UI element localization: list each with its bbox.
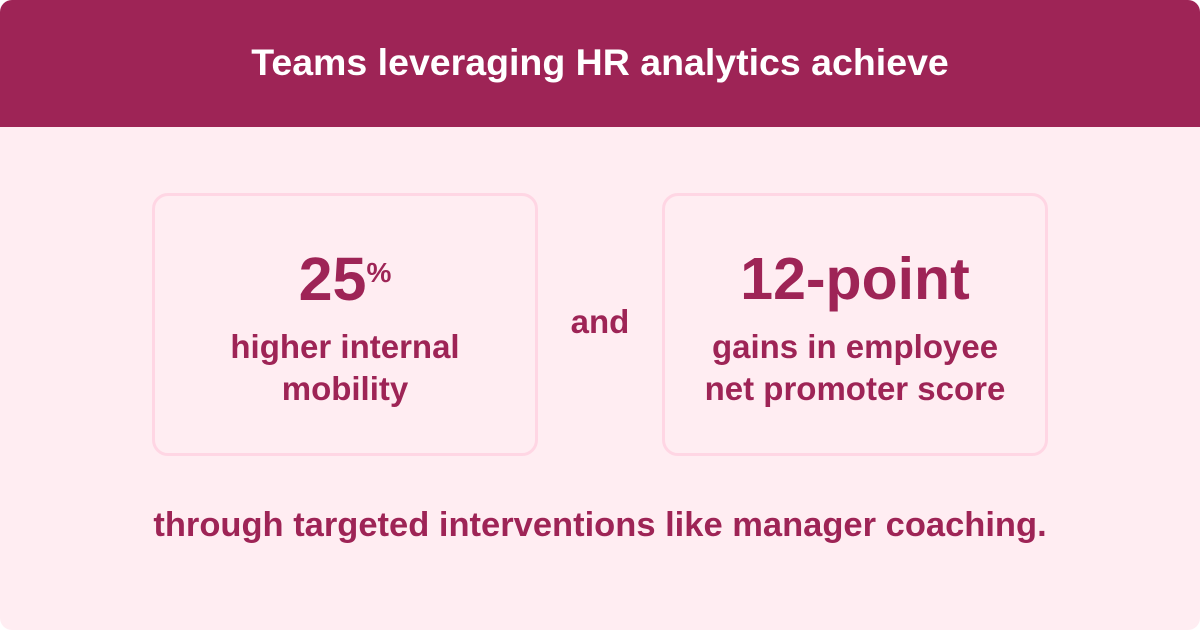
text: higher internal mobility: higher internal xyxy=(230,328,460,365)
title banner: Teams leveraging HR analytics achieve xyxy=(251,41,949,83)
text: gains in employee net promoter score xyxy=(705,328,1005,407)
text: higher internal mobility: mobility xyxy=(282,370,408,407)
text: gains in employee net promoter score: gains in employee xyxy=(712,328,998,365)
connector text: and: and xyxy=(571,303,629,340)
stat: 25%: 25% xyxy=(299,245,391,313)
panel: internal mobility xyxy=(152,193,538,456)
text: gains in employee net promoter score: net promoter score xyxy=(705,370,1005,407)
panel: eNPS gains xyxy=(662,193,1048,456)
title banner xyxy=(0,0,1200,127)
text: higher internal mobility xyxy=(230,328,460,407)
stat: 12-point: 12-point xyxy=(740,246,970,312)
footer text: through targeted interventions like manager coaching. xyxy=(153,506,1047,544)
